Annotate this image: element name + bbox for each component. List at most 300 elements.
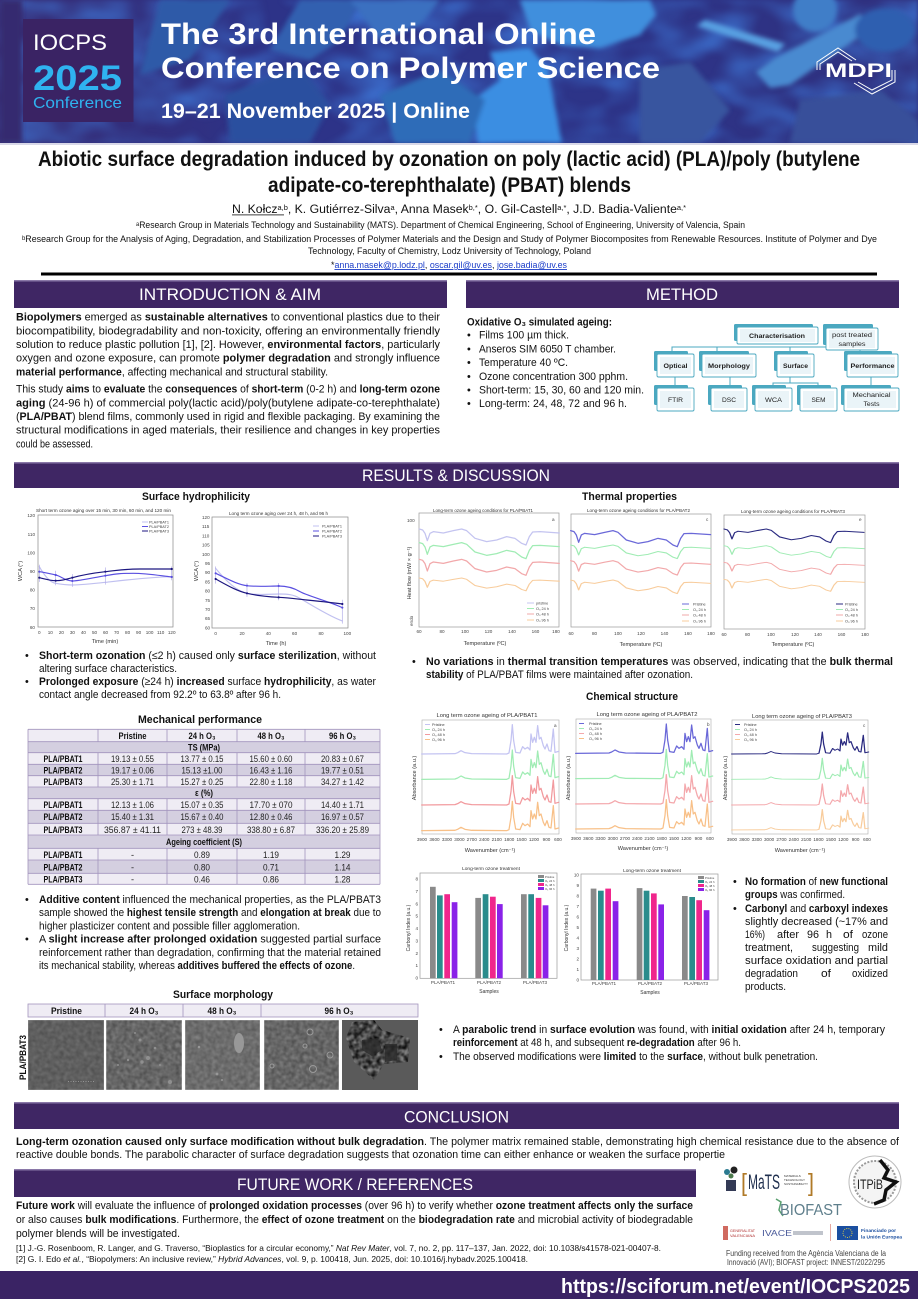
chart: short-term WCA: 70 [114,630,119,635]
bar chart: carbonyl index 2: O₃ 96 h [705,888,715,892]
chart: FTIR PLA/PBAT1: O₃ 24 h [432,728,445,732]
bar chart: carbonyl index 1: 7 [415,889,418,894]
text: hydrophilicity findings: Short-term ozonation (≤2 h) caused only surface sterilization, without [39,650,376,662]
bar chart: carbonyl index 1: 5 [415,914,418,919]
chart: short-term WCA: 80 [125,630,131,635]
chart: FTIR PLA/PBAT3: 3600 [739,837,750,842]
bar chart: carbonyl index 2: Long-term ozone treatment [623,868,682,874]
table: mechanical performance: - [131,850,134,860]
logos: funders [723,1224,902,1241]
chart: short-term WCA: 90 [30,569,35,574]
bar chart: carbonyl index 2: 6 [576,914,579,920]
text: chemical findings: surface oxidation and partial [745,955,888,967]
text: mechanical findings: • [25,934,29,946]
chart: DSC PLA/PBAT1: O₃ 96 h [536,618,549,622]
flow diagram: characterisation methods: SEM [812,397,826,404]
flow diagram: characterisation methods: Performance [850,363,895,370]
chart: long-term WCA: 110 [202,533,210,538]
chart: FTIR PLA/PBAT1: Long term ozone ageing of PLA/PBAT1 [436,713,538,719]
chart: DSC PLA/PBAT3: Pristine [845,602,858,606]
chart: FTIR PLA/PBAT3: Wavenumber (cm⁻¹) [775,848,825,854]
chart: long-term WCA: 0 [214,631,217,636]
text: funding note [726,1249,886,1267]
header: results and discussion [14,462,899,488]
SEM micrograph: 48 h [185,1020,260,1090]
conference logo box [23,19,134,122]
banner [0,0,918,143]
morphology table header [28,1004,418,1017]
chart: FTIR PLA/PBAT3 [723,714,871,854]
bar chart: carbonyl index 2: Samples [640,990,660,996]
text: method list: • [467,344,471,356]
bar chart: carbonyl index 1: O₃ 24 h [545,879,555,883]
chart: DSC PLA/PBAT3: 80 [745,632,750,637]
chart: DSC PLA/PBAT1: Temperature (ºC) [464,640,507,647]
chart: DSC PLA/PBAT1: Heat flow (mW × g⁻¹) [407,546,413,599]
text: conclusion [16,1136,900,1161]
text: references: [1] J.-G. Rosenboom, R. Langer, and G. Traverso, “Bioplastics for a circular economy,” Nat Rev Mater, vol. 7, no. 2, pp. 117–137, Jan. 2022, doi: 10.1038/s41578-021-00407-8. [16,1243,661,1253]
bar chart: carbonyl index 1: Long-term ozone treatment [462,866,521,872]
text: introduction [16,312,441,450]
text: mechanical findings: reinforcement rather than degradation, confirming that the material retained [39,947,381,959]
text: introduction: Biopolymers emerged as sustainable alternatives to conventional plastics due to their [16,312,440,324]
conference title: The 3rd International Online [161,18,596,51]
table: mechanical performance: 34.27 ± 1.42 [321,777,364,787]
conference title: 19–21 November 2025 | Online [161,100,470,123]
chart: FTIR PLA/PBAT2: Long term ozone ageing of PLA/PBAT2 [596,712,698,718]
text: surface evolution findings: reinforcement at 48 h, and subsequent re-degradation after 96 h. [453,1037,741,1049]
chart: FTIR PLA/PBAT1: O₃ 48 h [432,733,445,737]
text: method list [467,317,644,410]
morphology table header: 48 h O₃ [208,1006,236,1017]
text: chemical findings: ozone [862,929,888,941]
chart: FTIR PLA/PBAT3: 1200 [838,837,849,842]
chart: DSC PLA/PBAT3: e [859,517,862,522]
text: mechanical findings [25,894,381,972]
chart: FTIR PLA/PBAT2: 3900 [571,836,582,841]
chart: short-term WCA: 40 [81,630,86,635]
chart: short-term WCA: 110 [28,532,35,537]
chart: DSC PLA/PBAT3: 100 [767,632,775,637]
affiliations: Technology, Faculty of Chemistry, Lodz University of Technology, Poland [308,246,591,256]
table: mechanical performance: 19.77 ± 0.51 [321,766,364,776]
bar chart: carbonyl index 1: PLA/PBAT3 [523,980,548,985]
text: introduction: biocompatibility, biodegradability and non-toxicity, offering an environmentally friendly [16,325,441,337]
table: mechanical performance: 22.80 ± 1.18 [250,777,292,787]
SEM micrograph: 96 h (aggregate) [342,1020,418,1090]
authors: a,* [677,205,686,212]
chart: FTIR PLA/PBAT3: O₃ 96 h [744,738,757,742]
chart: DSC PLA/PBAT2: Long-term ozone ageing conditions for PLA/PBAT2 [587,508,691,513]
bar chart: carbonyl index 2: O₃ 24 h [705,880,715,884]
chart: FTIR PLA/PBAT3: O₃ 24 h [744,728,757,732]
table: mechanical performance: 1.14 [334,862,350,872]
chart: short-term WCA: 90 [136,630,142,635]
table: mechanical performance: 16.97 ± 0.57 [321,812,364,822]
header: conclusion: CONCLUSION [404,1108,509,1126]
logo: MaTS: ] [808,1169,814,1197]
chart: long-term WCA: 60 [292,631,298,636]
chart: FTIR PLA/PBAT2: O₃ 48 h [589,732,602,736]
table: mechanical performance [28,729,380,884]
chart: long-term WCA: WCA (°) [194,561,200,581]
chart: DSC PLA/PBAT1: 140 [508,629,516,634]
logo: MaTS: MATERIALS [784,1174,801,1178]
heading: mechanical performance: Mechanical performance [138,714,262,726]
chart: FTIR PLA/PBAT2: 1500 [669,836,680,841]
text: future work: polymer blends will be investigated. [16,1228,180,1240]
authors: a,* [557,205,567,212]
affiliations [22,220,877,270]
chart: DSC PLA/PBAT3: 60 [721,632,727,637]
chart: long-term WCA: 40 [266,631,271,636]
chart: FTIR PLA/PBAT1: 1200 [529,837,540,842]
chart: short-term WCA: 20 [59,630,64,635]
chart: FTIR PLA/PBAT2: 1800 [657,836,667,841]
chart: DSC PLA/PBAT1: Long-term ozone ageing conditions for PLA/PBAT1 [433,508,534,513]
chart: FTIR PLA/PBAT1: 3000 [454,837,465,842]
authors: b,* [469,205,478,212]
text: chemical findings: degradation [745,968,798,980]
authors: , K. Gutiérrez-Silva [288,204,391,216]
text: method list: Long-term: 24, 48, 72 and 96 h. [479,398,627,410]
table: mechanical performance: 96 h O₃ [329,731,356,741]
chart: FTIR PLA/PBAT1: 2700 [467,837,477,842]
flow diagram: characterisation methods [654,324,899,411]
chart: FTIR PLA/PBAT3: 3900 [727,837,738,842]
footer bar with URL: https://sciforum.net/event/IOCPS2025 [561,1276,910,1298]
flow diagram: characterisation methods: Optical [664,363,688,370]
chart: FTIR PLA/PBAT2 [566,712,714,852]
chart: FTIR PLA/PBAT2: 3300 [595,836,606,841]
conference logo box: IOCPS [33,30,107,55]
SEM micrograph: 96 h (low magnification) [264,1020,339,1090]
text: references: [2] G. I. Edo et al., “Biopolymers: An inclusive review,” Hybrid Advances, vol. 9, p. 100418, Jun. 2025, doi: 10.1016/j.hybadv.2025.100418. [16,1254,528,1264]
text: method list: Temperature 40 ºC. [479,357,568,369]
text: chemical findings: oxidized [852,968,888,980]
chart: FTIR PLA/PBAT3: 1500 [826,837,836,842]
text: future work: Future work will evaluate the influence of prolonged oxidation processes (over 96 h) to verify whether ozone treatment affects only the surface [16,1200,693,1212]
text: chemical findings: after [777,929,799,941]
table: mechanical performance: PLA/PBAT3 [44,874,82,884]
text: method list: Short-term: 15, 30, 60 and 120 min. [479,384,644,396]
bar chart: carbonyl index 1: 6 [415,901,418,906]
chart: long-term WCA: Time (h) [266,641,286,647]
chart: long-term WCA: 20 [239,631,245,636]
chart: short-term WCA: PLA/PBAT2 [149,525,169,529]
text: chemical findings: 16%) [745,929,765,941]
table: mechanical performance: PLA/PBAT3 [44,825,82,835]
chart: DSC PLA/PBAT1: O₃ 48 h [536,612,549,616]
conference logo box: Conference [33,95,122,112]
chart: long-term WCA: 95 [205,561,211,566]
chart: DSC PLA/PBAT1: a [552,517,555,522]
chart: FTIR PLA/PBAT1: Absorbance (a.u.) [412,756,418,800]
chart: long-term WCA: PLA/PBAT3 [322,534,342,538]
bar chart: carbonyl index 1: PLA/PBAT1 [431,980,456,985]
text: hydrophilicity findings [25,650,376,701]
bar chart: carbonyl index 2: 7 [576,904,579,909]
text: chemical findings: of [843,929,854,941]
chart: DSC PLA/PBAT2: O₃ 48 h [693,613,706,617]
chart: DSC PLA/PBAT2 [568,508,715,648]
text: chemical findings: No formation of new functional [745,876,888,888]
chart: long-term WCA: 80 [205,589,211,594]
authors: , J.D. Badia-Valiente [566,204,677,216]
bar chart: carbonyl index 2: PLA/PBAT1 [592,981,617,986]
chart: FTIR PLA/PBAT1: 3900 [417,837,428,842]
table: mechanical performance: Ageing coefficient (S) [166,837,242,847]
bar chart: carbonyl index 1: Samples [479,989,499,995]
flow diagram: characterisation methods: post treated [832,332,872,339]
header: future work and references: FUTURE WORK / REFERENCES [237,1175,473,1194]
text: method list: Oxidative O₃ simulated ageing: [467,317,612,329]
chart: long-term WCA: 90 [205,570,211,575]
text: hydrophilicity findings: • [25,650,29,662]
authors: a,b [278,205,288,212]
chart: short-term WCA: 60 [103,630,108,635]
conference title: Conference on Polymer Science [161,52,660,85]
text: method list: Films 100 µm thick. [479,330,569,342]
table: mechanical performance: 17.70 ± 070 [250,800,292,810]
table: mechanical performance: - [131,874,134,884]
table: mechanical performance: 13.77 ± 0.15 [180,754,224,764]
text: surface evolution findings: The observed modifications were limited to the surface, without bulk penetration. [453,1051,818,1063]
chart: FTIR PLA/PBAT3: 2400 [789,837,799,842]
table: mechanical performance: PLA/PBAT3 [44,777,82,787]
text: chemical findings: • [733,876,737,888]
chart: long-term WCA: 80 [318,631,324,636]
chart: DSC PLA/PBAT2: O₃ 24 h [693,608,706,612]
chart: DSC PLA/PBAT1: endo [409,615,414,626]
chart: DSC PLA/PBAT3: 140 [814,632,822,637]
table: mechanical performance: PLA/PBAT2 [44,862,82,872]
bar chart: carbonyl index 2: 1 [576,967,579,972]
logos: funders: GENERALITAT [730,1229,756,1233]
chart: FTIR PLA/PBAT2: b [707,722,710,727]
table: mechanical performance: 1.19 [263,850,279,860]
text: method list: • [467,371,471,383]
text: mechanical findings: higher plasticizer content and possible filler agglomeration. [39,920,300,932]
chart: short-term WCA: Time (min) [92,639,118,645]
chart: short-term WCA: 50 [92,630,97,635]
text: chemical findings: • [733,903,737,915]
heading: surface hydrophilicity: Surface hydrophilicity [142,491,251,503]
header: conclusion [14,1102,899,1129]
table: mechanical performance: 15.67 ± 0.40 [180,812,224,822]
chart: DSC PLA/PBAT3: Temperature (ºC) [772,641,815,648]
morphology table header: 96 h O₃ [324,1006,354,1017]
text: mechanical findings: Additive content influenced the mechanical properties, as the PLA/PBAT3 [39,894,381,906]
bar chart: carbonyl index 2: PLA/PBAT2 [638,981,663,986]
authors: a [390,205,395,212]
text: hydrophilicity findings: altering surface characteristics. [39,663,177,675]
table: mechanical performance: - [131,862,134,872]
chart: FTIR PLA/PBAT3: 3000 [764,837,775,842]
chart: DSC PLA/PBAT1: 120 [485,629,493,634]
chart: FTIR PLA/PBAT3: 3300 [752,837,762,842]
flow diagram: characterisation methods: Morphology [708,363,750,370]
bar chart: carbonyl index 1: Carbonyl Index (a.u.) [406,904,412,951]
logos: funders: la Unión Europea [861,1234,902,1240]
text: chemical findings: Carbonyl and carboxyl indexes [745,903,888,915]
chart: long-term WCA: 60 [205,625,211,630]
flow diagram: characterisation methods: DSC [722,397,736,404]
chart: FTIR PLA/PBAT1: 600 [554,837,562,842]
heading: surface morphology: Surface morphology [173,989,274,1001]
logos: funders: VALENCIANA [730,1234,755,1238]
MDPI logo [817,48,895,94]
authors: , O. Gil-Castell [478,204,557,216]
heading: thermal properties: Thermal properties [582,491,677,503]
chart: DSC PLA/PBAT3: O₃ 24 h [845,608,858,612]
chart: DSC PLA/PBAT2: 100 [614,631,622,636]
bar chart: carbonyl index 2: 2 [576,956,579,962]
bar chart: carbonyl index 1: 0 [415,976,418,980]
bar chart: carbonyl index 2: Pristine [705,876,715,880]
table: mechanical performance: 48 h O₃ [258,731,284,741]
chart: DSC PLA/PBAT3: Long-term ozone ageing conditions for PLA/PBAT3 [741,509,846,514]
chart: FTIR PLA/PBAT2: O₃ 96 h [589,737,602,741]
table: mechanical performance: 338.80 ± 6.87 [247,825,295,835]
text: introduction: structural modifications in aged materials, their resilience and changes in key properties [16,425,441,437]
table: mechanical performance: PLA/PBAT2 [44,812,82,822]
chart: FTIR PLA/PBAT1: 3600 [429,837,440,842]
bar chart: carbonyl index 1: 1 [415,963,418,968]
chart: DSC PLA/PBAT2: Temperature (ºC) [620,641,663,648]
chart: FTIR PLA/PBAT2: 2400 [632,836,643,841]
table: mechanical performance: TS (MPa) [188,742,220,752]
chart: long-term WCA: 100 [343,631,352,636]
flow diagram: characterisation methods: FTIR [668,397,683,404]
table: mechanical performance: Pristine [118,731,146,741]
chart: FTIR PLA/PBAT1: 1500 [516,837,527,842]
MDPI logo: MDPI [825,61,892,82]
affiliations: Research Group in Materials Technology and Sustainability (MATS). Department of Chemical Engineering, School of Engineering, University of Valencia, Spain [139,220,745,230]
table: mechanical performance: 356.87 ± 41.11 [104,825,161,835]
chart: FTIR PLA/PBAT2: Pristine [589,722,602,726]
chart: FTIR PLA/PBAT2: 2100 [644,836,655,841]
text: chemical findings: of [821,968,832,980]
chart: DSC PLA/PBAT1: 100 [461,629,469,634]
chart: FTIR PLA/PBAT1: Wavenumber (cm⁻¹) [465,848,515,854]
chart: FTIR PLA/PBAT1: O₃ 96 h [432,738,445,742]
logo: MaTS: MaTS [748,1171,780,1194]
chart: FTIR PLA/PBAT2: Wavenumber (cm⁻¹) [618,846,668,852]
text: surface evolution findings: • [439,1051,443,1063]
flow diagram: characterisation methods: samples [838,341,866,348]
bar chart: carbonyl index 2: 10 [574,872,579,878]
text: hydrophilicity findings: contact angle decreased from 92.2º to 63.8º after 96 h. [39,689,281,701]
chart: short-term WCA: WCA (°) [18,561,24,581]
chart: long-term WCA: 120 [202,515,210,520]
chart: short-term WCA: Short term ozone aging over 15 min, 30 min, 60 min, and 120 min [36,508,172,513]
text: future work [16,1200,693,1240]
chart: FTIR PLA/PBAT1 [412,713,562,854]
flow diagram: characterisation methods: Tests [864,401,880,408]
table: mechanical performance: 15.60 ± 0.60 [250,754,292,764]
bar chart: carbonyl index 1: O₃ 48 h [545,883,555,887]
chart: FTIR PLA/PBAT1: Pristine [432,723,445,727]
table: mechanical performance: 0.86 [263,874,279,884]
chart: FTIR PLA/PBAT1: 2100 [492,837,502,842]
text: method list: Anseros SIM 6050 T chamber. [479,344,616,356]
table: mechanical performance: 20.83 ± 0.67 [321,754,364,764]
chart: long-term WCA: 105 [202,543,210,548]
chart: DSC PLA/PBAT2: 140 [661,631,669,636]
chart: long-term WCA: 85 [205,579,211,584]
table: mechanical performance: 0.46 [194,874,210,884]
logos: funders: IVACE [762,1229,792,1238]
text: chemical findings: treatment, [745,942,793,954]
table: mechanical performance: 0.89 [194,850,210,860]
logo: MaTS: SUSTAINABILITY [784,1182,808,1186]
chart: short-term WCA: PLA/PBAT1 [149,520,169,524]
chart: DSC PLA/PBAT3: O₃ 48 h [845,613,858,617]
text: hydrophilicity findings: • [25,676,29,688]
bar chart: carbonyl index 1: 8 [415,876,418,882]
table: mechanical performance: 273 ± 48.39 [182,825,222,835]
text: future work: or also causes bulk modifications. Furthermore, the effect of ozone treatment on the biodegradation rate and microbial activity of biodegradable [16,1214,693,1226]
SEM micrograph: pristine [28,1020,104,1090]
text: mechanical findings: sample showed the highest tensile strength and elongation at break due to [39,907,381,919]
table: mechanical performance: PLA/PBAT2 [44,766,82,776]
text: mechanical findings: its mechanical stability, whereas additives buffered the effects of ozone. [39,960,355,972]
table: mechanical performance: 14.40 ± 1.71 [321,800,364,810]
chart: DSC PLA/PBAT3: O₃ 96 h [845,619,858,623]
heading: chemical structure: Chemical structure [586,691,678,703]
chart: short-term WCA [18,508,176,645]
chart: DSC PLA/PBAT1: pristine [536,601,548,605]
text: funding note: Funding received from the Agència Valenciana de la [726,1249,886,1258]
bar chart: carbonyl index 1: PLA/PBAT2 [477,980,502,985]
chart: long-term WCA: PLA/PBAT2 [322,529,342,533]
chart: DSC PLA/PBAT1: 100 [407,518,415,523]
header: introduction & aim [14,280,447,308]
text: chemical findings [733,876,888,993]
chart: DSC PLA/PBAT2: 120 [637,631,645,636]
flow diagram: characterisation methods: Characterisation [749,333,805,340]
table: mechanical performance: 12.80 ± 0.46 [250,812,292,822]
text: funding note: Innovació (AVI); BIOFAST project: INNEST/2022/295 [727,1258,885,1267]
chart: FTIR PLA/PBAT2: 900 [695,836,703,841]
text: introduction: aging (24-96 h) of commercial poly(lactic acid)/poly(butylene adipate-co-terephthalate) [16,397,440,409]
text: introduction: material performance, affecting mechanical and structural stability. [16,367,328,379]
chart: FTIR PLA/PBAT3: 900 [852,837,860,842]
chart: DSC PLA/PBAT2: 80 [592,631,597,636]
chart: DSC PLA/PBAT2: O₃ 96 h [693,619,706,623]
logo: MaTS: [ [741,1169,747,1197]
table: mechanical performance: 15.13 ±1.00 [182,766,222,776]
logo: ITPiB: ITPiB [857,1176,883,1192]
chart: DSC PLA/PBAT1: 80 [439,629,445,634]
bar chart: carbonyl index 2: 4 [576,936,579,940]
text: conclusion: Long-term ozonation caused only surface modification without bulk degradation. The polymer matrix remained stable, demonstrating high chemical resistance due to the absence of [16,1136,900,1148]
chart: short-term WCA: 30 [70,630,75,635]
table: mechanical performance: 24 h O₃ [188,731,216,741]
table: mechanical performance: 15.07 ± 0.35 [180,800,224,810]
logo: ITPiB [849,1156,901,1208]
text: mechanical findings: A slight increase after prolonged oxidation suggested partial surface [39,934,381,946]
chart: short-term WCA: 70 [30,606,35,611]
bar chart: carbonyl index 2: Carbonyl Index (a.u.) [564,904,570,951]
bar chart: carbonyl index 2: 3 [576,946,579,951]
chart: FTIR PLA/PBAT3: 2700 [776,837,787,842]
chart: FTIR PLA/PBAT3: 600 [863,837,871,842]
bar chart: carbonyl index 2 [564,868,718,996]
chart: DSC PLA/PBAT2: 160 [684,631,692,636]
row label: PLA/PBAT3: PLA/PBAT3 [18,1035,29,1080]
